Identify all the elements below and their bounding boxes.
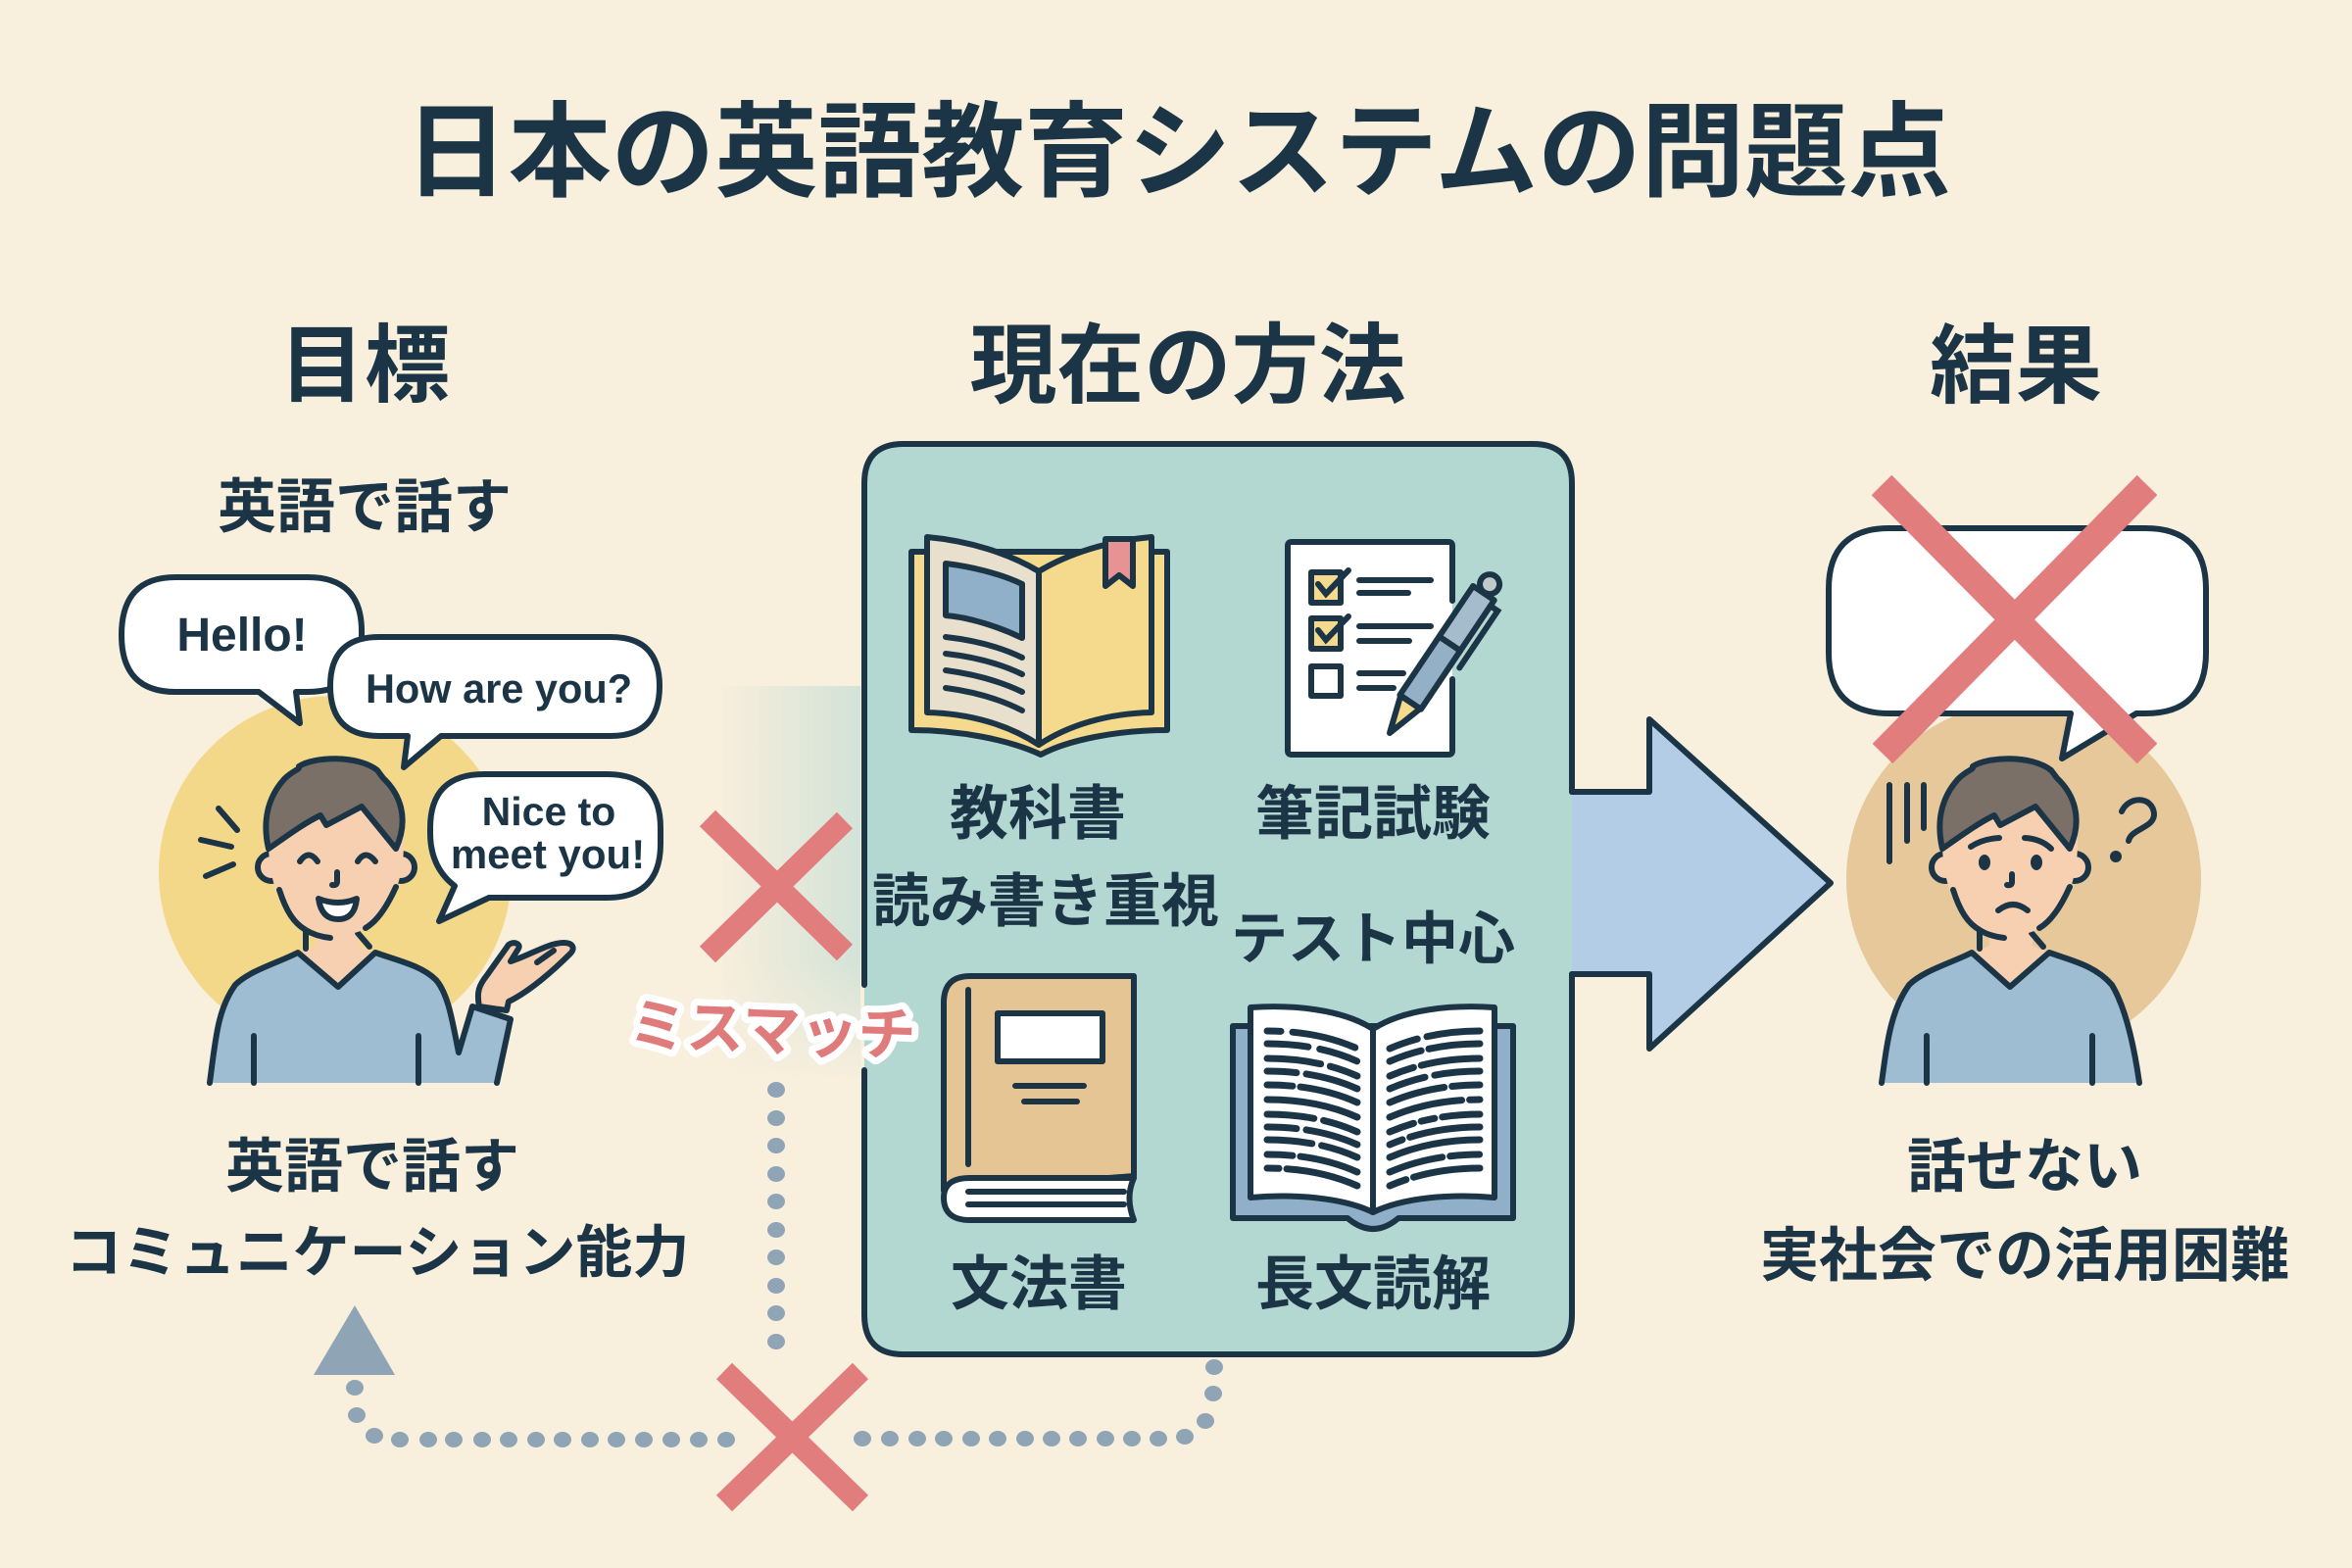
heading: goal: 目標 xyxy=(279,318,450,414)
goal caption top: 英語で話す xyxy=(218,474,512,540)
speech bubble: How are you? xyxy=(330,637,660,767)
arrow: method to result xyxy=(1572,719,1831,1049)
cross: broken feedback loop xyxy=(724,1371,860,1503)
speaking person illustration xyxy=(159,696,573,1083)
dotted feedback line bottom xyxy=(346,1359,1223,1447)
speech bubble: Nice to meet you!: meet you! xyxy=(451,831,645,877)
label: long reading comprehension: 長文読解 xyxy=(1255,1251,1491,1317)
title: 日本の英語教育システムの問題点 xyxy=(405,96,1951,211)
heading: current method: 現在の方法 xyxy=(970,317,1405,415)
speech bubble: How are you?: How are you? xyxy=(366,665,632,711)
speech bubble: Hello!: Hello! xyxy=(176,610,308,662)
goal description: コミュニケーション能力 xyxy=(66,1221,689,1285)
result description xyxy=(1760,1134,2289,1289)
icon: grammar book xyxy=(944,976,1134,1220)
heading: result: 結果 xyxy=(1930,318,2102,415)
confused person illustration xyxy=(1846,702,2201,1083)
label: textbook: 教科書 xyxy=(950,781,1126,847)
cross: goal vs method mismatch xyxy=(708,818,845,955)
speech bubble: Nice to meet you! xyxy=(430,774,661,921)
speech bubble: Hello! xyxy=(122,577,362,723)
icon: checklist and pen xyxy=(1288,542,1513,755)
label: reading and writing focus: 読み書き重視 xyxy=(872,869,1219,934)
dotted feedback line vertical xyxy=(767,1082,785,1349)
panel: current methods xyxy=(864,444,1572,1354)
result description: 話せない xyxy=(1907,1134,2142,1200)
arrowhead triangle to goal xyxy=(314,1305,395,1375)
goal description xyxy=(66,1134,689,1285)
empty speech bubble with cross xyxy=(1829,485,2206,759)
icon: open reading book xyxy=(1233,1006,1513,1229)
goal description: 英語で話す xyxy=(225,1134,519,1200)
label: test centered: テスト中心 xyxy=(1231,907,1515,971)
speech bubble: Nice to meet you!: Nice to xyxy=(482,789,615,834)
background glow beside panel xyxy=(749,686,860,1054)
label: grammar book: 文法書 xyxy=(951,1251,1127,1317)
result description: 実社会での活用困難 xyxy=(1760,1223,2289,1289)
label: mismatch: ミスマッチ xyxy=(627,994,917,1068)
icon: textbook xyxy=(911,537,1167,755)
label: written exam: 筆記試験 xyxy=(1255,781,1491,847)
